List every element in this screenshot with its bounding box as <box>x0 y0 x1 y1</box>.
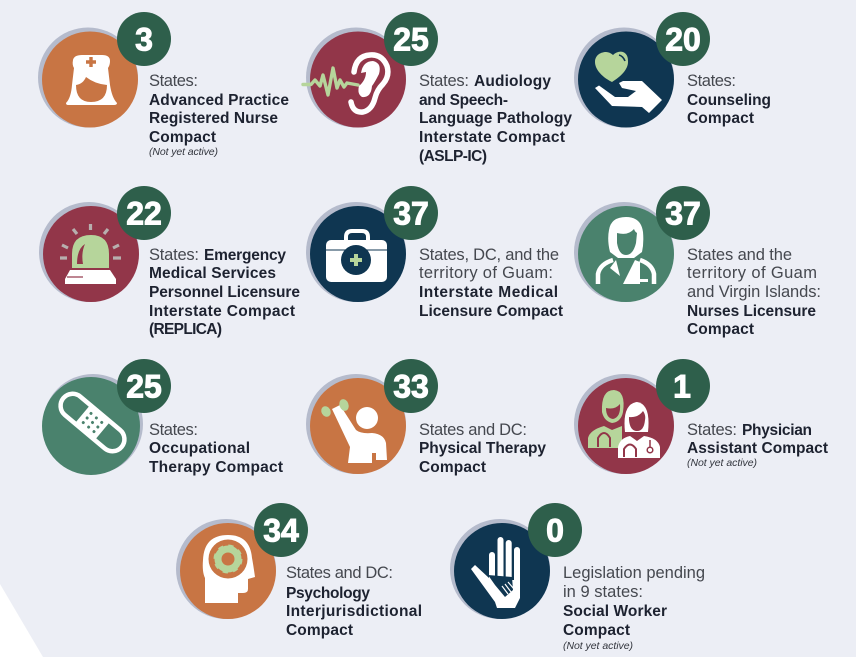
text: ASLP-IC: Audiology <box>474 73 551 90</box>
panel: Audiology and Speech-Language Pathology Interstate Compact <box>303 12 572 165</box>
count badge: 22 <box>117 186 171 240</box>
text: Social Worker: Social Worker <box>563 603 667 620</box>
count badge: 0 <box>528 503 582 557</box>
count badge: 1 <box>656 359 710 413</box>
count badge: 3 <box>117 12 171 66</box>
text: Counseling: Counseling <box>687 92 771 109</box>
text: NLC: States and the <box>687 246 792 264</box>
text: OT compact: Occupational <box>149 440 250 457</box>
white corner triangle <box>0 584 43 657</box>
text: APRN compact: (Not yet active) <box>149 146 218 158</box>
panel: Interstate Medical Licensure Compact <box>306 186 563 320</box>
icon: nurse <box>38 28 138 128</box>
icon: two clinicians <box>574 374 674 474</box>
text: APRN compact: States: <box>149 72 198 90</box>
text: NLC: territory of Guam <box>687 264 817 282</box>
text: PA compact: Assistant Compact <box>687 440 828 457</box>
text: Social Worker: in 9 states: <box>563 583 643 601</box>
text: IMLC: States, DC, and the <box>419 246 559 264</box>
text: Counseling: States: <box>687 72 736 90</box>
text: Social Worker: Legislation pending <box>563 564 705 582</box>
text: PA compact <box>687 421 828 469</box>
text: ASLP-IC <box>419 72 572 165</box>
text: IMLC: Interstate Medical <box>419 284 558 301</box>
text: PSYPACT: Psychology <box>286 585 370 602</box>
panel: Social Worker Compact <box>450 503 705 652</box>
count badge: 1: 1 <box>673 368 691 404</box>
text: REPLICA: Personnel Licensure <box>149 284 300 301</box>
text: ASLP-IC: Language Pathology <box>419 110 572 127</box>
count badge: 0: 0 <box>546 512 564 548</box>
text: REPLICA: Medical Services <box>149 265 276 282</box>
count badge: 25 <box>117 359 171 413</box>
count badge: 22: 22 <box>126 196 162 232</box>
count badge: 20 <box>656 12 710 66</box>
count badge: 34 <box>254 503 308 557</box>
icon: adult and child hands <box>450 519 550 619</box>
count badge: 20: 20 <box>665 22 701 58</box>
text: PSYPACT <box>286 564 422 639</box>
panel: Nurses Licensure Compact <box>574 186 821 338</box>
text: REPLICA <box>149 246 300 338</box>
text: APRN compact: Registered Nurse <box>149 110 278 127</box>
text: IMLC: Licensure Compact <box>419 303 563 320</box>
icon: emergency siren <box>39 202 139 302</box>
count badge: 37 <box>384 186 438 240</box>
text: NLC <box>687 246 821 338</box>
count badge: 33 <box>384 359 438 413</box>
icon: ear with sound wave <box>303 28 406 128</box>
count badge: 3: 3 <box>135 22 153 58</box>
icon: heart in hand <box>574 28 674 128</box>
text: Counseling: Compact <box>687 110 754 127</box>
panel: Counseling Compact <box>574 12 771 128</box>
icon: person lifting dumbbell <box>306 374 406 474</box>
text: ASLP-IC: (ASLP-IC) <box>419 148 487 165</box>
text: ASLP-IC: Interstate Compact <box>419 129 565 146</box>
count badge: 25 <box>384 12 438 66</box>
text: PSYPACT: States and DC: <box>286 564 393 582</box>
count badge: 37 <box>656 186 710 240</box>
text: OT compact: States: <box>149 421 198 439</box>
text: PA compact: (Not yet active) <box>687 457 757 469</box>
text: Social Worker: Compact <box>563 622 630 639</box>
count badge: 37: 37 <box>393 196 429 232</box>
count badge: 33: 33 <box>393 368 429 404</box>
text: REPLICA: Interstate Compact <box>149 303 295 320</box>
text: Social Worker <box>563 564 705 652</box>
panel: Physician Assistant Compact <box>574 359 828 474</box>
text: APRN compact: Advanced Practice <box>149 92 289 109</box>
panel: Physical Therapy Compact <box>306 359 546 476</box>
text: IMLC: territory of Guam: <box>419 264 553 282</box>
icon: female clinician <box>574 202 674 302</box>
panel: Occupational Therapy Compact <box>42 359 283 476</box>
text: PSYPACT: Interjurisdictional <box>286 603 422 620</box>
text: PA compact: Physician <box>742 422 812 439</box>
text: REPLICA: (REPLICA) <box>149 321 222 338</box>
text: REPLICA: Emergency <box>204 247 286 264</box>
text: ASLP-IC: and Speech- <box>419 92 508 109</box>
text: NLC: Nurses Licensure <box>687 303 816 320</box>
text: PT compact: Physical Therapy <box>419 440 546 457</box>
text: PA compact: States: <box>687 421 737 439</box>
text: NLC: Compact <box>687 321 754 338</box>
text: ASLP-IC: States: <box>419 72 469 90</box>
icon: medical kit <box>306 202 406 302</box>
text: APRN compact: Compact <box>149 129 216 146</box>
count badge: 25: 25 <box>393 22 429 58</box>
icon: head with gear <box>176 519 276 619</box>
text: PT compact: Compact <box>419 459 486 476</box>
panel: Advanced Practice Registered Nurse Compact <box>38 12 289 158</box>
panel: EMS REPLICA Compact <box>39 186 300 338</box>
text: PSYPACT: Compact <box>286 622 353 639</box>
text: OT compact: Therapy Compact <box>149 459 283 476</box>
count badge: 37: 37 <box>665 196 701 232</box>
icon: adhesive bandage <box>42 374 143 475</box>
panel: Psychology Interjurisdictional Compact <box>176 503 422 639</box>
text: PT compact: States and DC: <box>419 421 527 439</box>
text: APRN compact <box>149 72 289 158</box>
text: NLC: and Virgin Islands: <box>687 283 821 301</box>
text: Counseling <box>687 72 771 127</box>
count badge: 25: 25 <box>126 368 162 404</box>
text: PT compact <box>419 421 546 476</box>
text: OT compact <box>149 421 283 476</box>
text: IMLC <box>419 246 563 320</box>
text: REPLICA: States: <box>149 246 199 264</box>
count badge: 34: 34 <box>263 512 299 548</box>
text: Social Worker: (Not yet active) <box>563 640 633 652</box>
